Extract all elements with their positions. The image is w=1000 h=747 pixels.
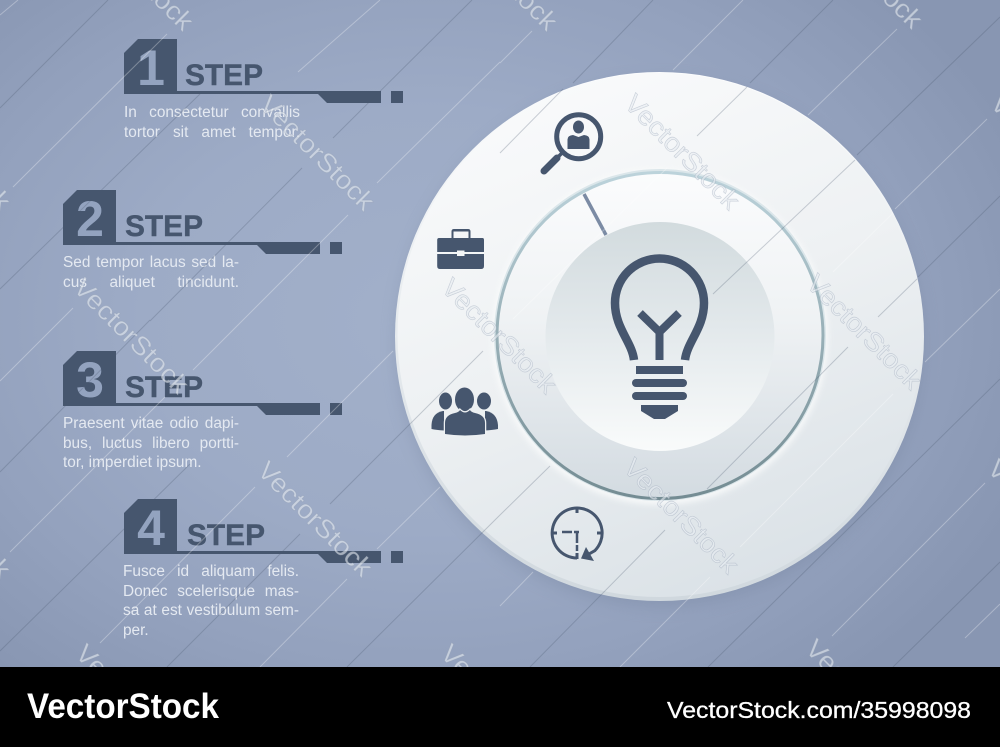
step 1 text (124, 104, 300, 140)
step 3 text: Praesent vitae odio dapi- (63, 415, 239, 432)
step 2 banner (63, 190, 342, 254)
step 3 text: bus, luctus libero portti- (63, 434, 239, 452)
step 4 banner: 4 (137, 500, 165, 556)
step 1 banner: STEP (185, 59, 263, 92)
step 1 text: tortor sit amet tempor. (124, 124, 300, 140)
watermarks: VectorStock (801, 268, 929, 396)
step 2 text: cus aliquet tincidunt. (63, 274, 239, 290)
step 3 text (63, 415, 239, 471)
step 3 banner: 3 (76, 352, 104, 408)
footer image id: VectorStock.com/35998098 (667, 697, 971, 723)
watermarks: VectorStock (436, 272, 564, 400)
footer brand: VectorStock (27, 687, 220, 726)
watermarks: VectorStock (68, 272, 196, 400)
step 2 text: Sed tempor lacus sed la- (63, 254, 239, 271)
icon: magnifier with person (544, 115, 601, 171)
step 2 banner: STEP (125, 210, 203, 243)
watermarks: VectorStock (252, 455, 380, 583)
icon: clock with arrow (552, 508, 602, 561)
watermarks: VectorStock (619, 88, 747, 216)
step 1 text: In consectetur convallis (124, 104, 300, 121)
step 2 banner: 2 (76, 191, 104, 247)
watermarks: VectorStock (254, 89, 382, 217)
step 3 banner: STEP (125, 371, 203, 404)
step 3 text: tor, imperdiet ipsum. (63, 454, 202, 471)
watermarks: VectorStock (618, 452, 746, 580)
step 4 banner (124, 499, 403, 563)
icon: light bulb (615, 258, 704, 419)
icon: group of people (432, 388, 498, 436)
step 2 text (63, 254, 239, 290)
step 3 (63, 351, 342, 471)
footer bar (0, 667, 1000, 747)
step 4 text: sa at est vestibulum sem- (123, 602, 299, 619)
step 4 banner: STEP (187, 519, 265, 552)
step 4 text: Donec scelerisque mas- (123, 582, 299, 600)
pointer line (584, 194, 606, 235)
step 4 text: Fusce id aliquam felis. (123, 563, 299, 580)
step 3 banner (63, 351, 342, 415)
step 4 (123, 499, 403, 638)
step 1 banner (124, 39, 403, 103)
icon: briefcase (437, 229, 484, 269)
step 1 (124, 39, 403, 140)
step 1 banner: 1 (137, 40, 165, 96)
step 4 text (123, 563, 299, 638)
step 2 (63, 190, 342, 290)
step 4 text: per. (123, 622, 149, 638)
